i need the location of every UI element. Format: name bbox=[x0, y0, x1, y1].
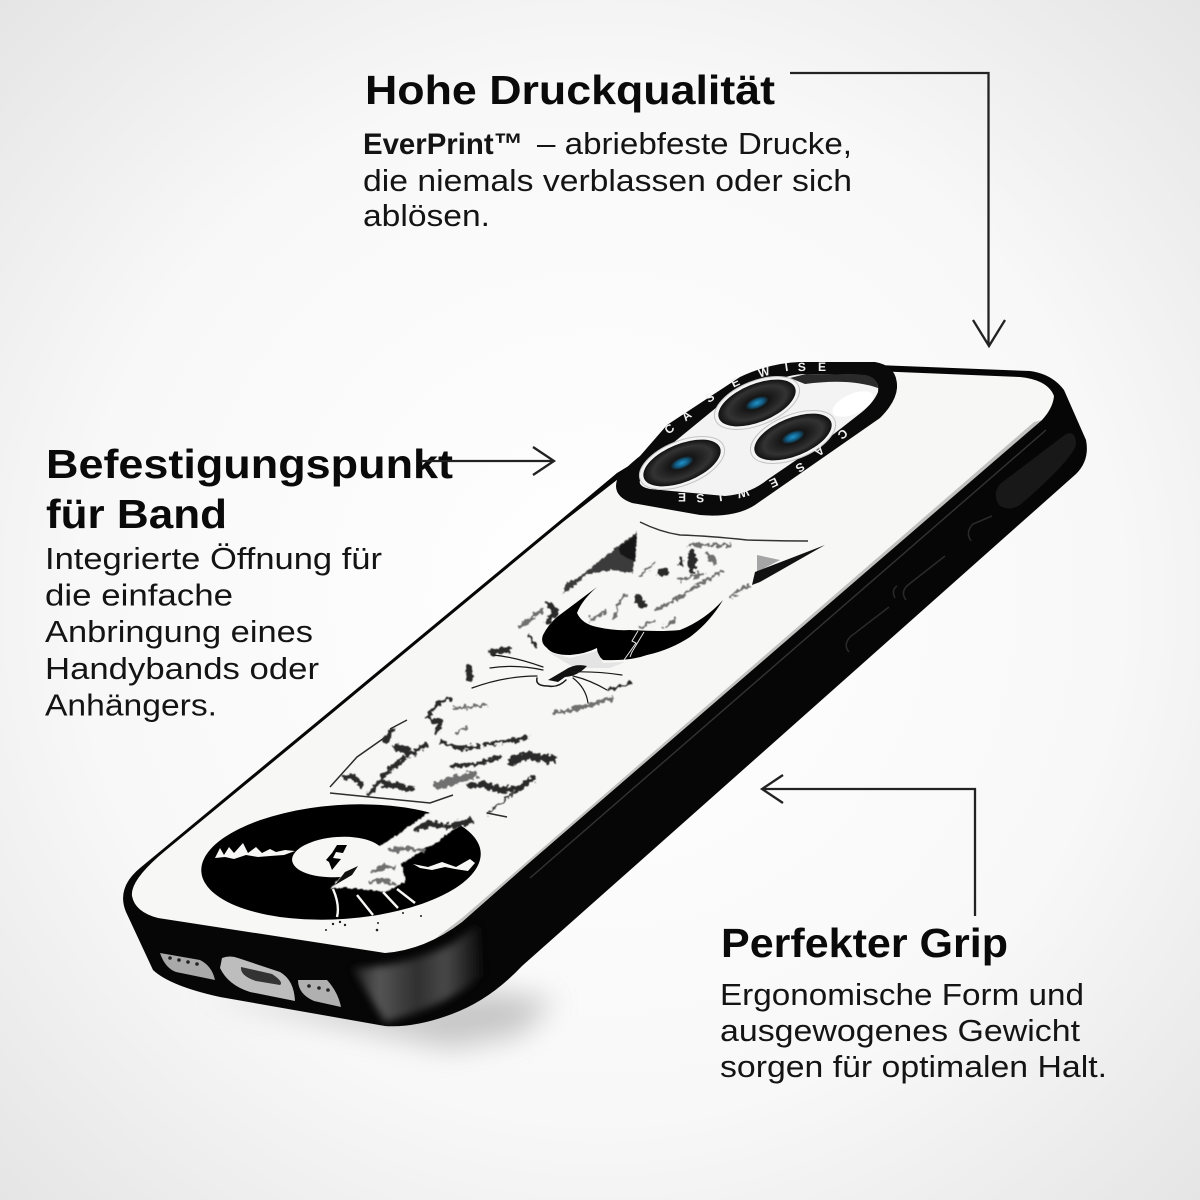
face edge shading bbox=[436, 420, 1042, 938]
case body bbox=[123, 362, 1087, 1026]
description: ablösen. bbox=[363, 198, 490, 233]
camera window bbox=[640, 374, 878, 496]
description: Integrierte Öffnung für bbox=[45, 541, 382, 576]
heading: Befestigungspunkt bbox=[46, 441, 453, 487]
nose and mouth bbox=[537, 665, 587, 686]
description bbox=[720, 977, 1107, 1084]
shading below glasses bbox=[548, 651, 625, 668]
heading: für Band bbox=[46, 491, 227, 537]
left ear bbox=[563, 532, 637, 594]
divider arc bbox=[893, 586, 897, 598]
heading bbox=[46, 441, 453, 537]
lens right bbox=[743, 400, 843, 474]
right ear bbox=[752, 545, 825, 585]
action button bbox=[968, 516, 992, 541]
cat and vinyl artwork bbox=[197, 522, 825, 931]
arrow: print quality bbox=[790, 73, 1005, 346]
vinyl record bbox=[197, 795, 485, 929]
side edge highlight bbox=[530, 430, 1046, 878]
brand lettering: S bbox=[797, 360, 806, 374]
bottom speaker right bbox=[298, 980, 341, 1007]
cheek fur bbox=[468, 604, 632, 713]
description: Ergonomische Form und bbox=[720, 977, 1084, 1012]
forehead markings bbox=[590, 545, 748, 628]
brand lettering: C bbox=[662, 421, 678, 437]
brand lettering: E bbox=[767, 475, 780, 491]
speaker holes right bbox=[307, 984, 330, 992]
body outline bbox=[330, 720, 507, 817]
brand lettering: W bbox=[757, 364, 772, 380]
brand lettering: A bbox=[679, 407, 695, 424]
description bbox=[363, 126, 852, 233]
description: – abriebfeste Drucke, bbox=[537, 126, 852, 161]
brand lettering: C bbox=[834, 426, 850, 442]
volume up bbox=[903, 556, 945, 600]
arrow: grip bbox=[762, 775, 975, 916]
arrow: strap attachment bbox=[421, 447, 554, 475]
brand lettering bbox=[662, 360, 850, 505]
body stripes bbox=[345, 698, 552, 813]
sunglasses bbox=[542, 587, 723, 660]
description: EverPrint™ bbox=[363, 128, 523, 161]
white back face bbox=[132, 368, 1054, 953]
brand lettering: E bbox=[678, 490, 686, 504]
speaker holes left bbox=[168, 956, 199, 966]
lens top bbox=[707, 366, 807, 440]
brand lettering: A bbox=[811, 443, 827, 460]
groove highlight right bbox=[413, 859, 475, 871]
head outline bbox=[640, 522, 808, 541]
bottom corner sheen bbox=[352, 925, 482, 1022]
paw stripes bbox=[370, 821, 470, 884]
heading: Hohe Druckqualität bbox=[365, 67, 775, 113]
description: die einfache bbox=[45, 578, 233, 612]
brand lettering: I bbox=[784, 360, 789, 374]
band attachment recess bbox=[996, 433, 1076, 508]
lens left bbox=[632, 426, 732, 500]
phone drop shadow bbox=[200, 990, 555, 1048]
phone case illustration bbox=[123, 360, 1087, 1026]
camera bumper bbox=[616, 362, 897, 516]
volume down bbox=[846, 607, 889, 652]
description: Anhängers. bbox=[45, 688, 217, 722]
description: Handybands oder bbox=[45, 651, 319, 686]
vinyl label mark bbox=[326, 845, 347, 870]
brand lettering: S bbox=[793, 459, 807, 475]
charge port bbox=[220, 956, 295, 1001]
callout: print quality bbox=[363, 67, 852, 233]
groove highlight left bbox=[215, 843, 295, 859]
callout: strap attachment bbox=[45, 441, 453, 722]
camera island bbox=[616, 360, 897, 516]
cat leg and paw bbox=[331, 812, 473, 892]
paw toes bbox=[335, 866, 358, 885]
speckles bbox=[325, 912, 422, 931]
brand lettering: S bbox=[696, 491, 705, 505]
brand lettering: E bbox=[818, 360, 826, 374]
description bbox=[45, 541, 382, 722]
bottom speaker left bbox=[160, 953, 215, 980]
brand lettering: S bbox=[703, 390, 717, 406]
glasses bolt bbox=[624, 631, 644, 660]
side buttons bbox=[846, 516, 992, 652]
whiskers bbox=[472, 655, 622, 703]
description: die niemals verblassen oder sich bbox=[363, 163, 852, 198]
brand lettering: E bbox=[729, 374, 742, 390]
description: Anbringung eines bbox=[45, 614, 313, 649]
callout: grip bbox=[720, 920, 1107, 1084]
window inner shadow bbox=[790, 374, 878, 388]
flash bbox=[829, 386, 877, 422]
claws bbox=[333, 889, 415, 917]
vinyl label bbox=[291, 834, 385, 880]
description: sorgen für optimalen Halt. bbox=[720, 1049, 1107, 1084]
description: ausgewogenes Gewicht bbox=[720, 1013, 1080, 1048]
brand lettering: W bbox=[735, 485, 750, 501]
heading: Perfekter Grip bbox=[721, 920, 1008, 966]
brand lettering: I bbox=[718, 490, 723, 504]
